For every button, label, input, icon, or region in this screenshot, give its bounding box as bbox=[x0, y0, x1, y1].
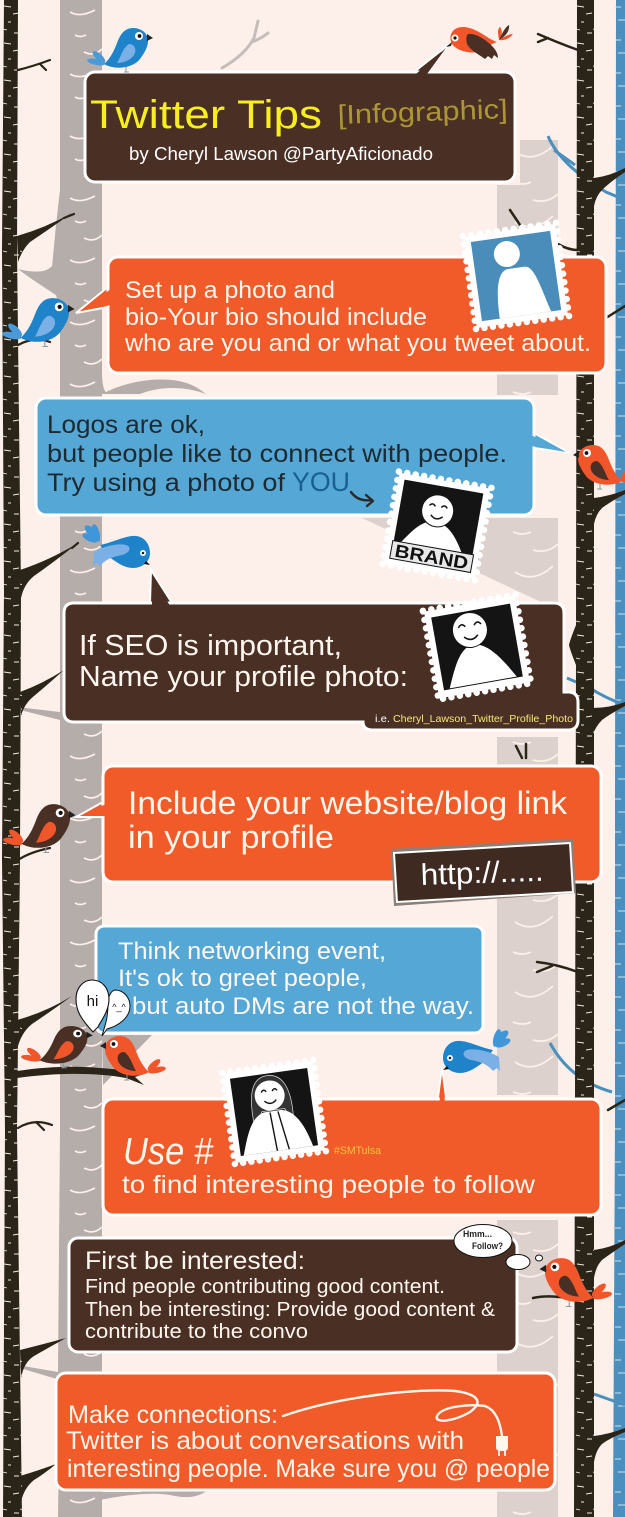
panel: set up a photo and bio bbox=[76, 257, 606, 373]
caption: i.e. bbox=[375, 714, 390, 725]
icon: blue bird, panel one bbox=[1, 298, 75, 346]
blue tree, right bbox=[548, 0, 625, 1517]
panel: be interested bbox=[69, 1238, 517, 1352]
thought bubble: Hmm Follow: Follow? bbox=[472, 1241, 503, 1251]
dark tree trunk, right bbox=[510, 0, 625, 1517]
panel: SEO: Name your profile photo: bbox=[79, 661, 408, 693]
panel: logos: Try using a photo of bbox=[47, 469, 285, 497]
icon: brown bird, panel four bbox=[2, 804, 76, 852]
icon: blue bird, panel three bbox=[81, 523, 150, 568]
arrow bbox=[351, 492, 373, 506]
byline: by Cheryl Lawson @PartyAficionado bbox=[129, 144, 433, 164]
text: Use #: Use # bbox=[123, 1131, 214, 1173]
icon: orange bird, title right bbox=[446, 25, 513, 59]
panel: networking: but auto DMs are not the way. bbox=[132, 993, 474, 1020]
panel: set up a photo and bio: who are you and or what you tweet about. bbox=[124, 330, 591, 357]
speech bubble: smile: ^_^ bbox=[112, 1002, 127, 1012]
panel: make connections bbox=[56, 1373, 555, 1490]
icon: blue bird, title left bbox=[87, 28, 153, 72]
panel: SEO: Cheryl_Lawson_Twitter_Profile_Photo bbox=[393, 714, 573, 725]
text block: First be interested: bbox=[85, 1247, 305, 1275]
text block: Set up a photo and bbox=[125, 277, 335, 304]
panel: be interested: Then be interesting: Provide good content & bbox=[85, 1299, 496, 1321]
text block: Make connections: bbox=[68, 1401, 278, 1429]
panel: website link: in your profile bbox=[128, 819, 334, 855]
speech bubble: hi: hi bbox=[87, 993, 98, 1010]
hashtag: #SMTulsa bbox=[334, 1145, 382, 1157]
stamp: BRAND bbox=[383, 472, 491, 580]
text: to find interesting people to follow bbox=[122, 1171, 536, 1199]
branch with two birds bbox=[17, 1067, 147, 1085]
panel: networking bbox=[96, 926, 483, 1033]
panel: networking: It's ok to greet people, bbox=[118, 965, 367, 992]
grey birch tree, left bbox=[0, 0, 268, 1517]
panel: logos: but people like to connect with people. bbox=[47, 440, 507, 468]
panel: make connections: interesting people. Make sure you @ people bbox=[67, 1455, 550, 1483]
panel: website link bbox=[76, 766, 601, 906]
heading: Infographic tag: [Infographic] bbox=[337, 94, 508, 130]
http box bbox=[391, 839, 576, 906]
icon: orange bird, panel two bbox=[573, 445, 625, 489]
panel: make connections: Twitter is about conversations with bbox=[66, 1427, 464, 1455]
text block: If SEO is important, bbox=[79, 630, 342, 662]
icon: blue bird, panel six bbox=[443, 1028, 512, 1073]
stamp: person with long hair bbox=[222, 1060, 326, 1164]
panel: logos bbox=[36, 398, 570, 515]
panel: be interested: contribute to the convo bbox=[85, 1321, 308, 1343]
icon: orange bird, panel seven bbox=[540, 1258, 613, 1306]
panel: logos: YOU bbox=[292, 467, 350, 497]
stamp: profile silhouette bbox=[463, 223, 569, 329]
stamp: smiling person bbox=[423, 595, 531, 699]
thought bubble: Hmm Follow bbox=[454, 1224, 542, 1270]
speech bubble: hi bbox=[76, 980, 109, 1032]
grey birch tree, right bbox=[362, 140, 558, 1517]
panel: set up a photo and bio: bio-Your bio should include bbox=[125, 304, 427, 331]
panel: hashtags bbox=[103, 1068, 601, 1215]
icon: orange bird on branch bbox=[100, 1036, 166, 1080]
text block: Think networking event, bbox=[118, 938, 386, 965]
heading: Twitter Tips: Twitter Tips bbox=[90, 93, 322, 137]
label: BRAND: BRAND bbox=[393, 541, 470, 573]
panel: be interested: Find people contributing good content. bbox=[85, 1276, 445, 1298]
thought bubble: Hmm Follow: Hmm... bbox=[463, 1229, 492, 1239]
icon: brown bird on branch bbox=[20, 1026, 93, 1068]
icon: cord and plug bbox=[283, 1390, 508, 1456]
panel: SEO bbox=[64, 570, 578, 730]
text block: Logos are ok, bbox=[47, 411, 205, 439]
text block: Include your website/blog link bbox=[128, 785, 568, 821]
speech bubble: smile bbox=[102, 990, 130, 1036]
http box: http://..... bbox=[420, 855, 544, 892]
dark tree trunk, left bbox=[2, 0, 147, 1517]
panel: title bbox=[85, 46, 515, 182]
